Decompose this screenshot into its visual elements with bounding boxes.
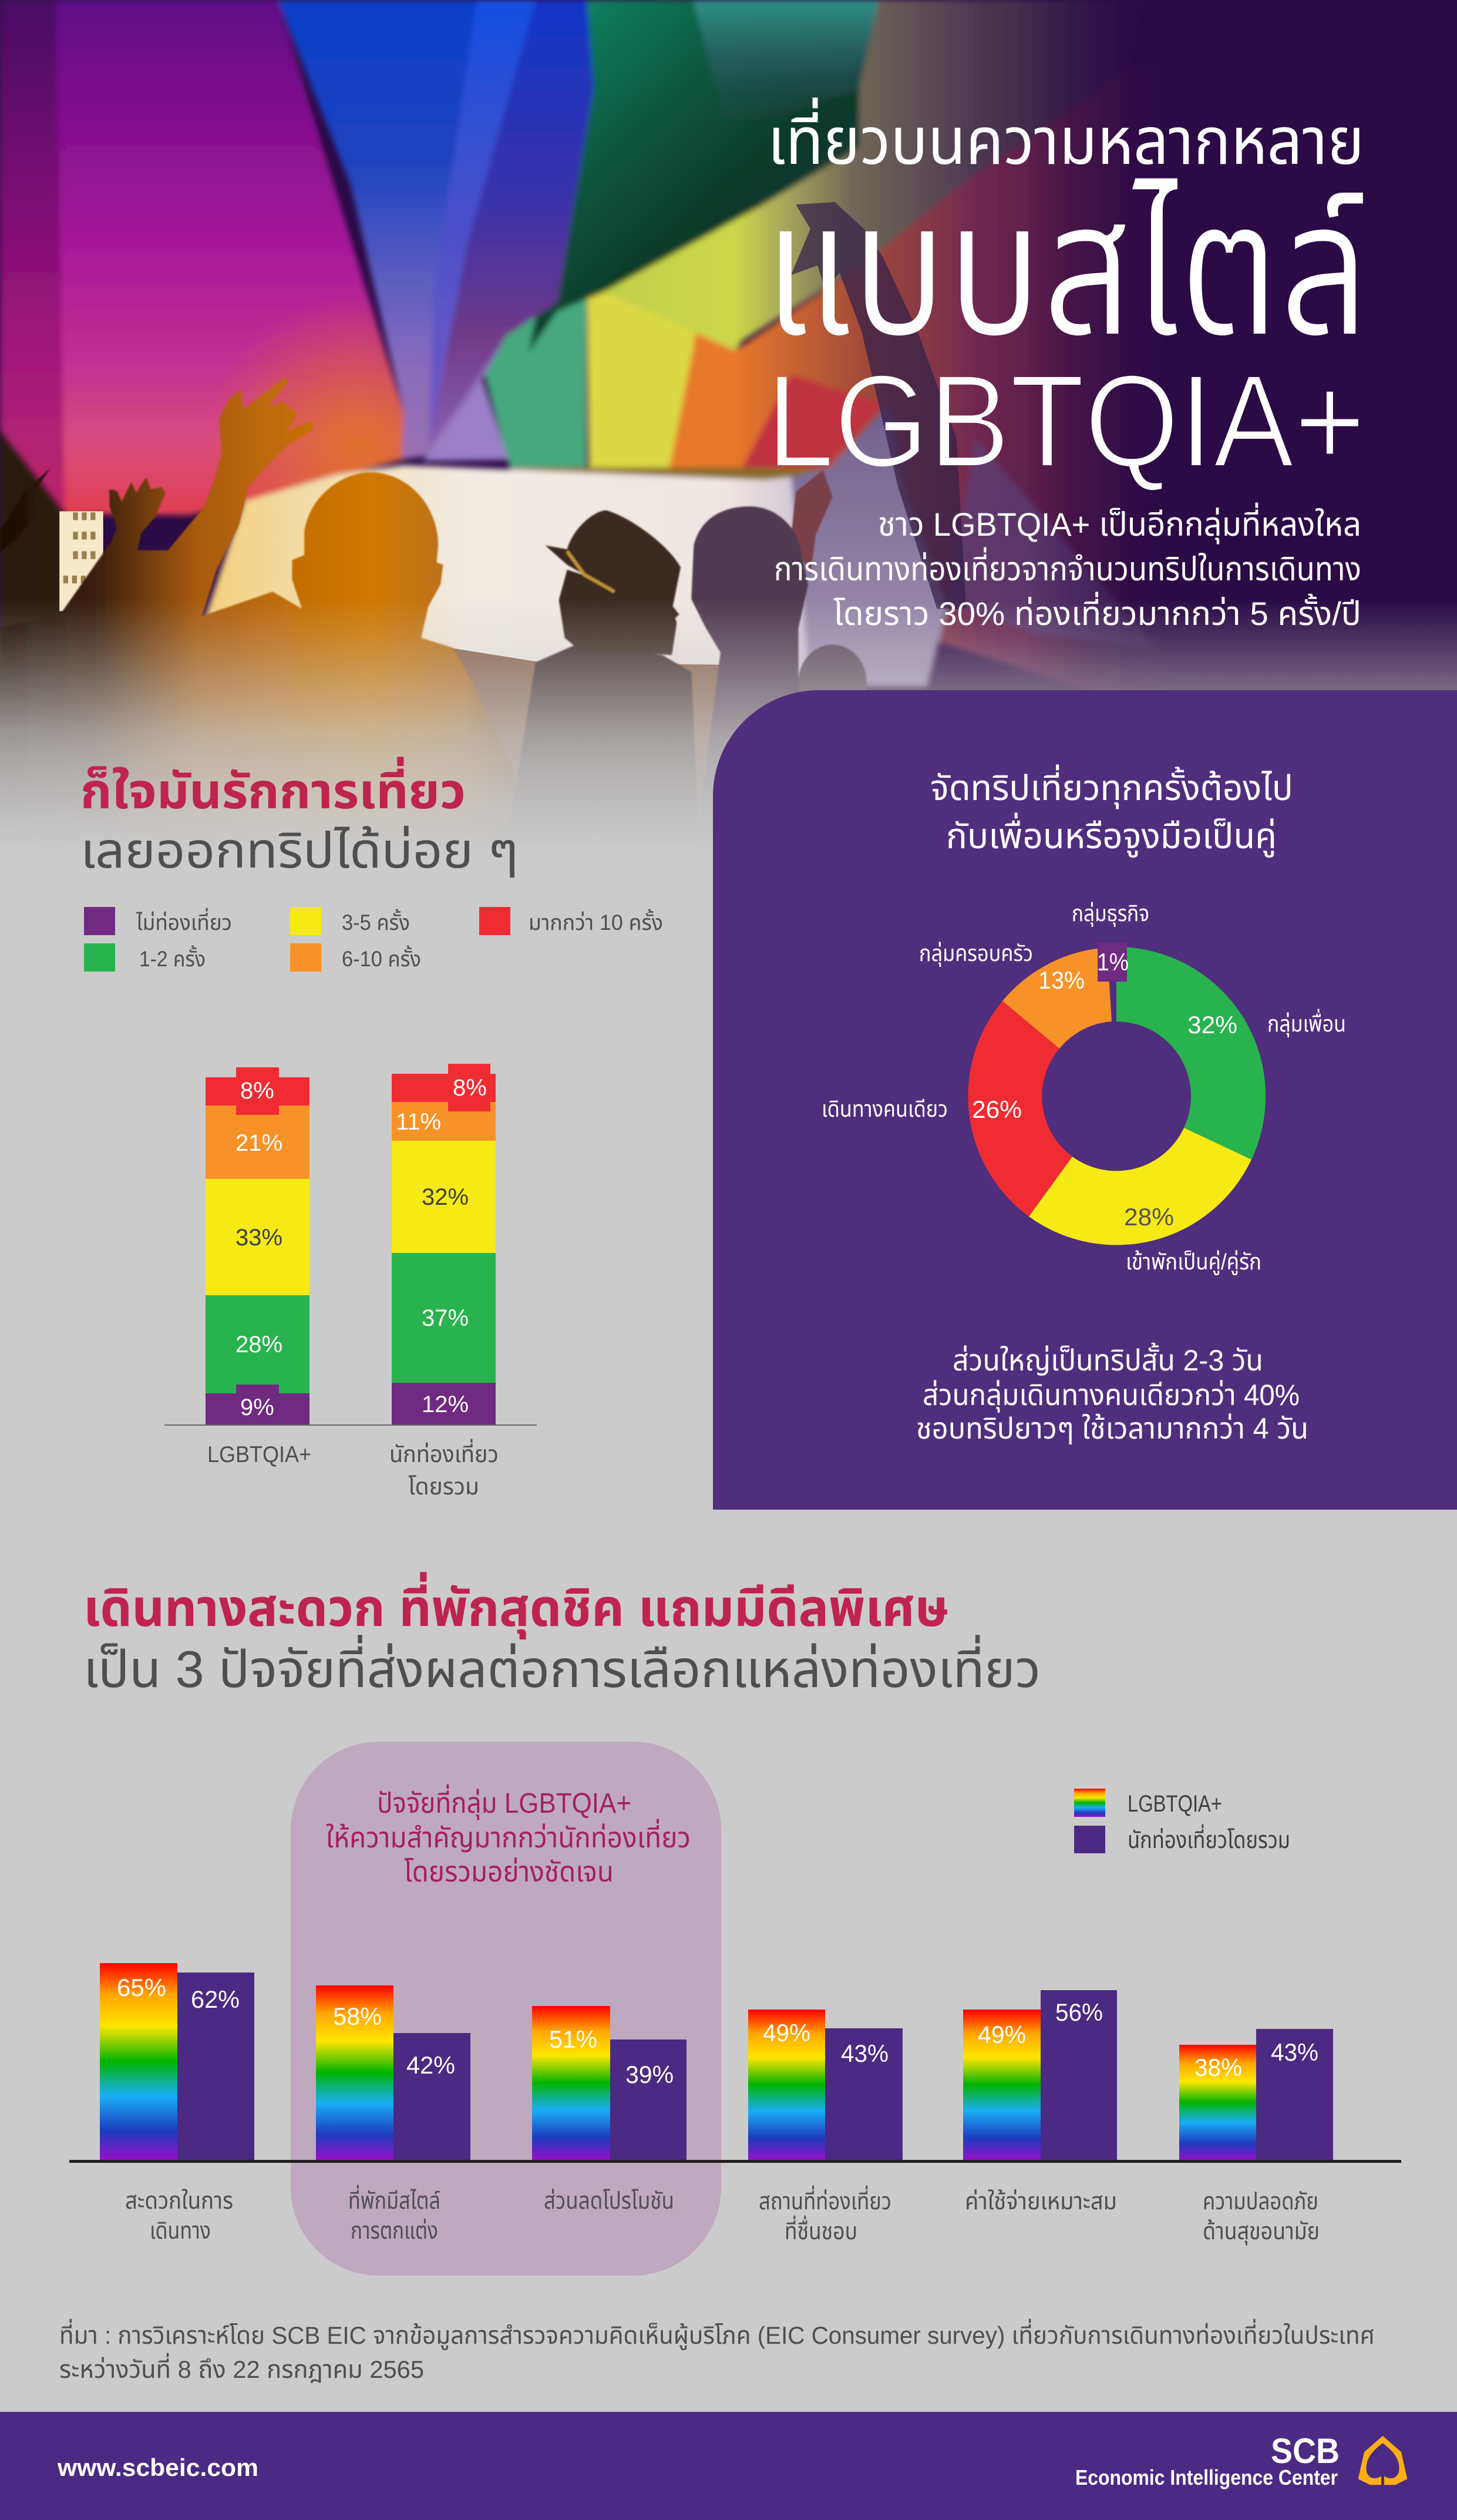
bars: affordable: 49% — [978, 2021, 1026, 2048]
subtitle — [774, 502, 1361, 632]
stacked bar category labels: โดยรวม — [408, 1474, 479, 1500]
source note — [59, 2319, 1375, 2383]
donut chart: 26% — [972, 1096, 1022, 1123]
legend: trips per year: 3-5 ครั้ง — [342, 909, 410, 935]
legend: bar chart: LGBTQIA+ — [1128, 1791, 1222, 1817]
bars: favourite place: 43% — [841, 2039, 889, 2067]
stacked bar: all tourists: 12% — [422, 1392, 469, 1417]
bars: affordable: 56% — [1055, 1998, 1103, 2026]
source note: ที่มา : การวิเคราะห์โดย SCB EIC จากข้อมูลการสำรวจความคิดเห็นผู้บริโภค (EIC Consumer survey) เที่ยวกับการเดินทางท่องเที่ยวในประเทศ — [59, 2319, 1375, 2350]
legend: trips per year: 1-2 ครั้ง — [139, 945, 206, 971]
stacked bar: LGBTQIA+: 33% — [235, 1225, 282, 1251]
panel: group travel — [713, 690, 1457, 1510]
legend: trips per year: 6-10 ครั้ง — [342, 945, 421, 971]
hero photo: rainbow flag and crowd silhouettes — [0, 0, 1457, 887]
bar chart category labels — [125, 2185, 1320, 2245]
bars: safety — [1179, 2029, 1333, 2160]
panel heading: จัดทริปเที่ยวทุกครั้งต้องไป — [930, 764, 1293, 809]
legend: bar chart — [1074, 1789, 1290, 1853]
legend: bar chart: นักท่องเที่ยวโดยรวม — [1128, 1824, 1290, 1853]
SCB wordmark: Economic Intelligence Center — [1075, 2465, 1338, 2489]
bars: stylish stay: 58% — [333, 2002, 382, 2030]
donut labels: กลุ่มเพื่อน — [1267, 1009, 1346, 1037]
donut labels — [822, 902, 1346, 1275]
heading: factors — [83, 1572, 1041, 1698]
title: เที่ยวบนความหลากหลาย — [768, 97, 1364, 178]
donut chart: 32% — [1187, 1011, 1237, 1039]
callout text: ให้ความสำคัญมากกว่านักท่องเที่ยว — [326, 1819, 691, 1854]
donut labels: กลุ่มครอบครัว — [919, 942, 1033, 967]
stacked bar chart — [164, 1064, 537, 1500]
bar chart category labels: ค่าใช้จ่ายเหมาะสม — [965, 2189, 1117, 2215]
stacked bar category labels — [207, 1439, 499, 1500]
bar chart category labels: สะดวกในการ — [125, 2188, 233, 2214]
bar chart category labels: ความปลอดภัย — [1203, 2189, 1318, 2215]
bar chart category labels: ส่วนลดโปรโมชัน — [544, 2188, 674, 2214]
donut chart — [968, 943, 1266, 1245]
footer — [0, 2412, 1457, 2520]
stacked bar: LGBTQIA+: 21% — [235, 1130, 282, 1156]
stacked bar: all tourists — [392, 1064, 496, 1425]
bar chart: decision factors — [69, 1963, 1401, 2245]
panel note — [916, 1342, 1308, 1445]
subtitle: โดยราว 30% ท่องเที่ยวมากกว่า 5 ครั้ง/ปี — [833, 592, 1361, 632]
callout highlight panel — [291, 1742, 721, 2276]
bars: safety: 43% — [1271, 2038, 1318, 2066]
website: www.scbeic.com — [57, 2454, 258, 2481]
stacked bar: all tourists: 32% — [422, 1184, 469, 1210]
bars: safety: 38% — [1194, 2054, 1242, 2081]
stacked bar: LGBTQIA+: 28% — [235, 1332, 282, 1358]
bars: promotion: 51% — [549, 2025, 597, 2053]
subtitle: ชาว LGBTQIA+ เป็นอีกกลุ่มที่หลงใหล — [878, 502, 1361, 544]
stacked bar: LGBTQIA+: 9% — [240, 1395, 274, 1420]
silhouette with hat — [517, 509, 696, 797]
stacked bar: all tourists: 8% — [453, 1075, 487, 1101]
callout text: ปัจจัยที่กลุ่ม LGBTQIA+ — [377, 1784, 631, 1820]
callout text: โดยรวมอย่างชัดเจน — [404, 1857, 614, 1888]
SCB wordmark: SCB — [1271, 2431, 1340, 2471]
subtitle: การเดินทางท่องเที่ยวจากจำนวนทริปในการเดินทาง — [774, 547, 1361, 587]
scaffold tower — [59, 511, 103, 611]
bars: convenience: 62% — [191, 1985, 240, 2013]
stacked bar: all tourists: 11% — [396, 1109, 441, 1135]
stacked bar category labels: นักท่องเที่ยว — [389, 1439, 499, 1467]
bars: convenience: 65% — [117, 1974, 166, 2001]
legend: trips per year: มากกว่า 10 ครั้ง — [529, 909, 663, 935]
panel note: ชอบทริปยาวๆ ใช้เวลามากกว่า 4 วัน — [916, 1412, 1308, 1445]
flag shadow of raised hand — [791, 202, 966, 609]
crowd silhouettes — [0, 377, 867, 824]
callout text — [326, 1784, 691, 1888]
donut labels: เข้าพักเป็นคู่/คู่รัก — [1126, 1250, 1261, 1275]
legend: trips per year: ไม่ท่องเที่ยว — [136, 908, 232, 935]
donut labels: กลุ่มธุรกิจ — [1072, 902, 1149, 927]
bars: affordable — [963, 1990, 1117, 2160]
donut labels: เดินทางคนเดียว — [822, 1097, 948, 1122]
bars: stylish stay: 42% — [406, 2051, 455, 2079]
bars: favourite place — [748, 2010, 903, 2160]
right figures — [690, 470, 867, 782]
bars: favourite place: 49% — [763, 2019, 810, 2047]
heading: factors: เดินทางสะดวก ที่พักสุดชิค แถมมีดีลพิเศษ — [83, 1572, 949, 1639]
stacked bar: LGBTQIA+ — [206, 1067, 309, 1425]
icon: SCB logo — [1358, 2436, 1407, 2485]
legend: trips per year — [84, 907, 663, 972]
bar chart category labels: การตกแต่ง — [351, 2218, 438, 2244]
source note: ระหว่างวันที่ 8 ถึง 22 กรกฎาคม 2565 — [59, 2353, 424, 2383]
stacked bar: LGBTQIA+: 8% — [240, 1078, 274, 1104]
bar chart category labels: เดินทาง — [150, 2218, 211, 2244]
bars: promotion — [532, 2006, 687, 2160]
donut chart: 13% — [1038, 966, 1085, 994]
panel heading: กับเพื่อนหรือจูงมือเป็นคู่ — [946, 812, 1277, 858]
bars: convenience — [100, 1963, 254, 2160]
bar chart category labels: ด้านสุขอนามัย — [1203, 2219, 1320, 2245]
title: LGBTQIA+ — [766, 348, 1365, 495]
stacked bar: all tourists: 37% — [422, 1305, 469, 1331]
panel heading — [930, 764, 1293, 858]
donut chart: 1% — [1097, 948, 1129, 976]
stacked bar category labels: LGBTQIA+ — [207, 1442, 311, 1467]
title — [763, 97, 1369, 495]
panel note: ส่วนใหญ่เป็นทริปสั้น 2-3 วัน — [953, 1342, 1263, 1377]
bar chart category labels: ที่ชื่นชอบ — [785, 2215, 857, 2245]
bar chart category labels: ที่พักมีสไตล์ — [348, 2185, 440, 2214]
bar chart category labels: สถานที่ท่องเที่ยว — [759, 2185, 891, 2215]
bars: promotion: 39% — [625, 2061, 674, 2088]
panel note: ส่วนกลุ่มเดินทางคนเดียวกว่า 40% — [923, 1379, 1300, 1413]
heading: frequency: เลยออกทริปได้บ่อย ๆ — [80, 823, 519, 878]
bars: stylish stay — [316, 1985, 470, 2160]
heading: factors: เป็น 3 ปัจจัยที่ส่งผลต่อการเลือกแหล่งท่องเที่ยว — [83, 1635, 1041, 1698]
donut chart: 28% — [1124, 1203, 1174, 1231]
lower crowd band — [450, 648, 799, 804]
heading: frequency — [80, 757, 519, 878]
SCB wordmark — [1075, 2431, 1340, 2489]
heading: frequency: ก็ใจมันรักการเที่ยว — [80, 757, 466, 819]
